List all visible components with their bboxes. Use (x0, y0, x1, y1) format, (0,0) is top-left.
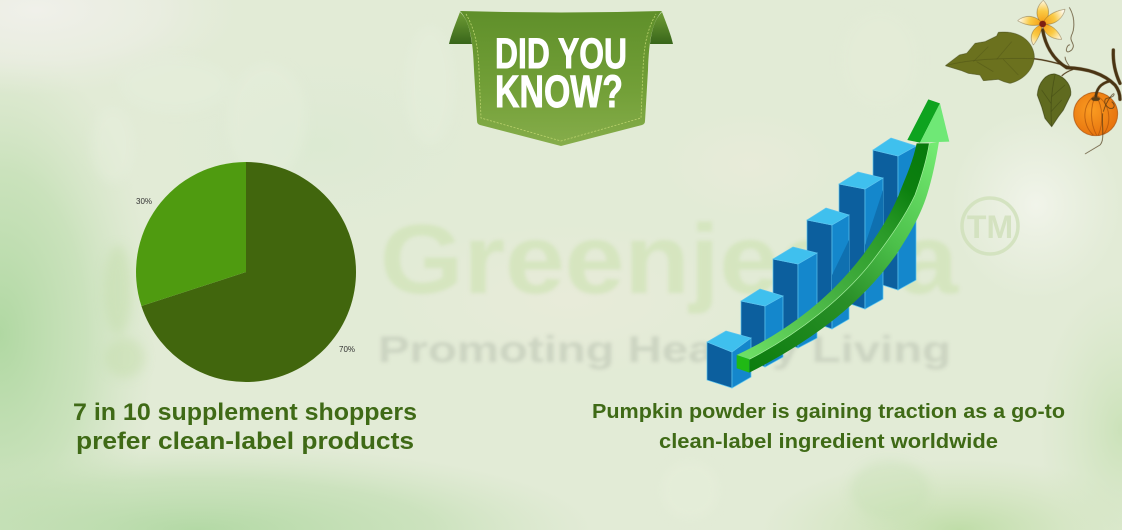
tendril (1085, 94, 1114, 154)
bars (707, 138, 916, 388)
watermark logo: TM (967, 209, 1013, 245)
illustration: pumpkin vine (945, 0, 1120, 154)
ribbon body (460, 11, 662, 146)
vine stem (1043, 30, 1120, 99)
ribbon left fold (449, 12, 472, 44)
caption left (73, 399, 417, 455)
caption right: clean-label ingredient worldwide (659, 431, 998, 453)
pumpkin (1074, 92, 1118, 136)
watermark logo: Promoting Healthy Living (378, 329, 951, 370)
small leaf (1037, 74, 1071, 127)
large leaf (945, 32, 1034, 83)
banner: did you know (449, 11, 673, 146)
caption right (592, 401, 1065, 453)
banner text: DID YOU (495, 30, 627, 78)
growth arrow (737, 99, 949, 373)
bar 6 (873, 138, 916, 290)
label 70%: 70% (339, 345, 355, 354)
bar 2 (741, 289, 783, 367)
caption left: prefer clean-label products (76, 428, 414, 455)
watermark logo (378, 198, 1018, 370)
ribbon right fold (650, 12, 673, 44)
bar 1 (707, 331, 751, 388)
bar 3 (773, 247, 817, 348)
flower (1018, 0, 1065, 45)
growth chart (707, 99, 949, 388)
label 30%: 30% (136, 197, 152, 206)
bar 4 (807, 208, 849, 329)
slice 70% (141, 162, 356, 382)
watermark logo: Greenjeeva (380, 204, 960, 314)
pumpkin stalk (1096, 81, 1110, 99)
slice 30% (136, 162, 246, 306)
caption left: 7 in 10 supplement shoppers (73, 399, 417, 426)
pie chart (136, 162, 356, 382)
bar 5 (839, 172, 883, 309)
background leaf shapes (91, 10, 930, 520)
banner: did you know: KNOW? (495, 66, 623, 117)
caption right: Pumpkin powder is gaining traction as a go-to (592, 401, 1065, 423)
